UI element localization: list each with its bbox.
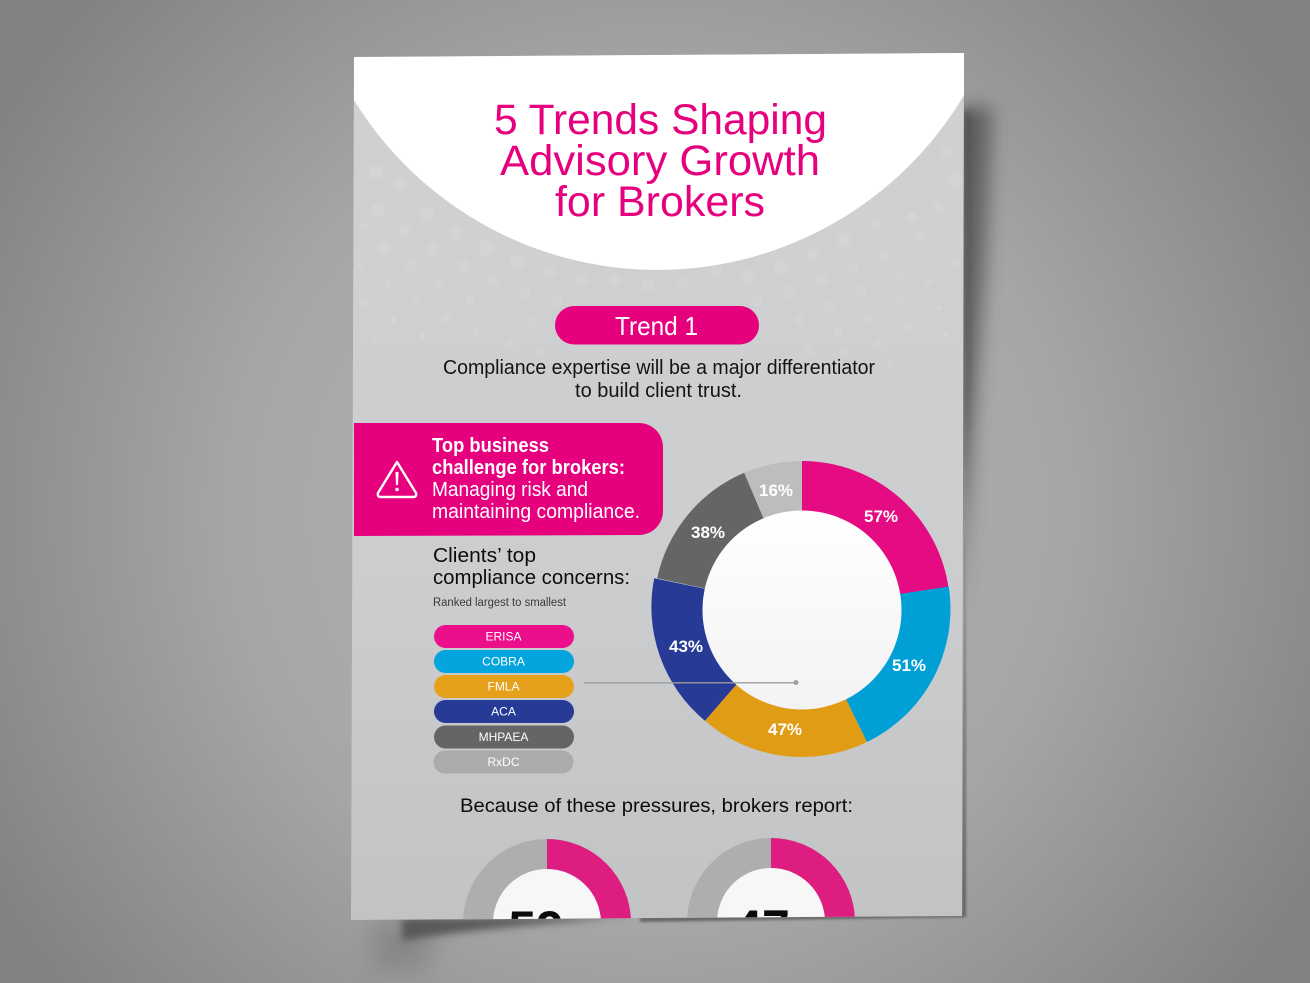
legend pills: ACA — [491, 704, 516, 718]
donut chart: compliance concerns: 47% — [768, 720, 802, 739]
trend 1 pill: Trend 1 — [615, 311, 698, 341]
donut chart: compliance concerns: 43% — [669, 637, 703, 656]
callout: top business challenge — [354, 423, 663, 536]
donut chart: compliance concerns — [651, 461, 950, 757]
icon: warning triangle — [378, 462, 416, 497]
leader line — [584, 680, 798, 685]
donut chart: compliance concerns: 57% — [864, 507, 898, 526]
legend pills — [434, 625, 574, 774]
concerns heading: compliance concerns: — [433, 567, 630, 589]
concerns heading: Clients’ top — [433, 545, 536, 567]
title: 5 Trends Shaping — [494, 96, 827, 144]
paper sheet — [351, 53, 964, 983]
ranking note: Ranked largest to smallest — [433, 597, 567, 609]
mini donut 2: 47 — [734, 900, 790, 956]
mini donuts — [463, 838, 855, 920]
donut chart: compliance concerns: 51% — [892, 656, 926, 675]
concerns heading — [433, 545, 630, 589]
legend pills: RxDC — [488, 755, 520, 769]
dot pattern — [357, 146, 961, 368]
mini donut 1: 59 — [508, 901, 564, 957]
white header arc — [354, 53, 964, 270]
trend 1 pill — [555, 306, 759, 344]
callout text: Managing risk and — [432, 479, 588, 501]
legend pills: MHPAEA — [479, 730, 528, 744]
title: for Brokers — [555, 178, 765, 226]
callout text: Top business — [432, 435, 549, 457]
legend pills: COBRA — [482, 654, 525, 668]
trend description: to build client trust. — [575, 380, 742, 402]
callout text — [432, 435, 640, 523]
pressures heading: Because of these pressures, brokers report: — [460, 795, 853, 817]
mini donut 2 — [687, 838, 855, 918]
paper shadow — [372, 105, 992, 970]
title — [494, 96, 827, 226]
title: Advisory Growth — [500, 137, 820, 185]
mini donut 1 — [463, 839, 631, 920]
trend description: Compliance expertise will be a major differentiator — [443, 357, 875, 379]
callout text: maintaining compliance. — [432, 501, 640, 523]
callout text: challenge for brokers: — [432, 457, 625, 479]
legend pills: ERISA — [485, 630, 522, 644]
donut chart: compliance concerns: 38% — [691, 523, 725, 542]
legend pills: FMLA — [487, 680, 520, 694]
donut chart: compliance concerns: 16% — [759, 481, 793, 500]
trend description — [443, 357, 875, 402]
